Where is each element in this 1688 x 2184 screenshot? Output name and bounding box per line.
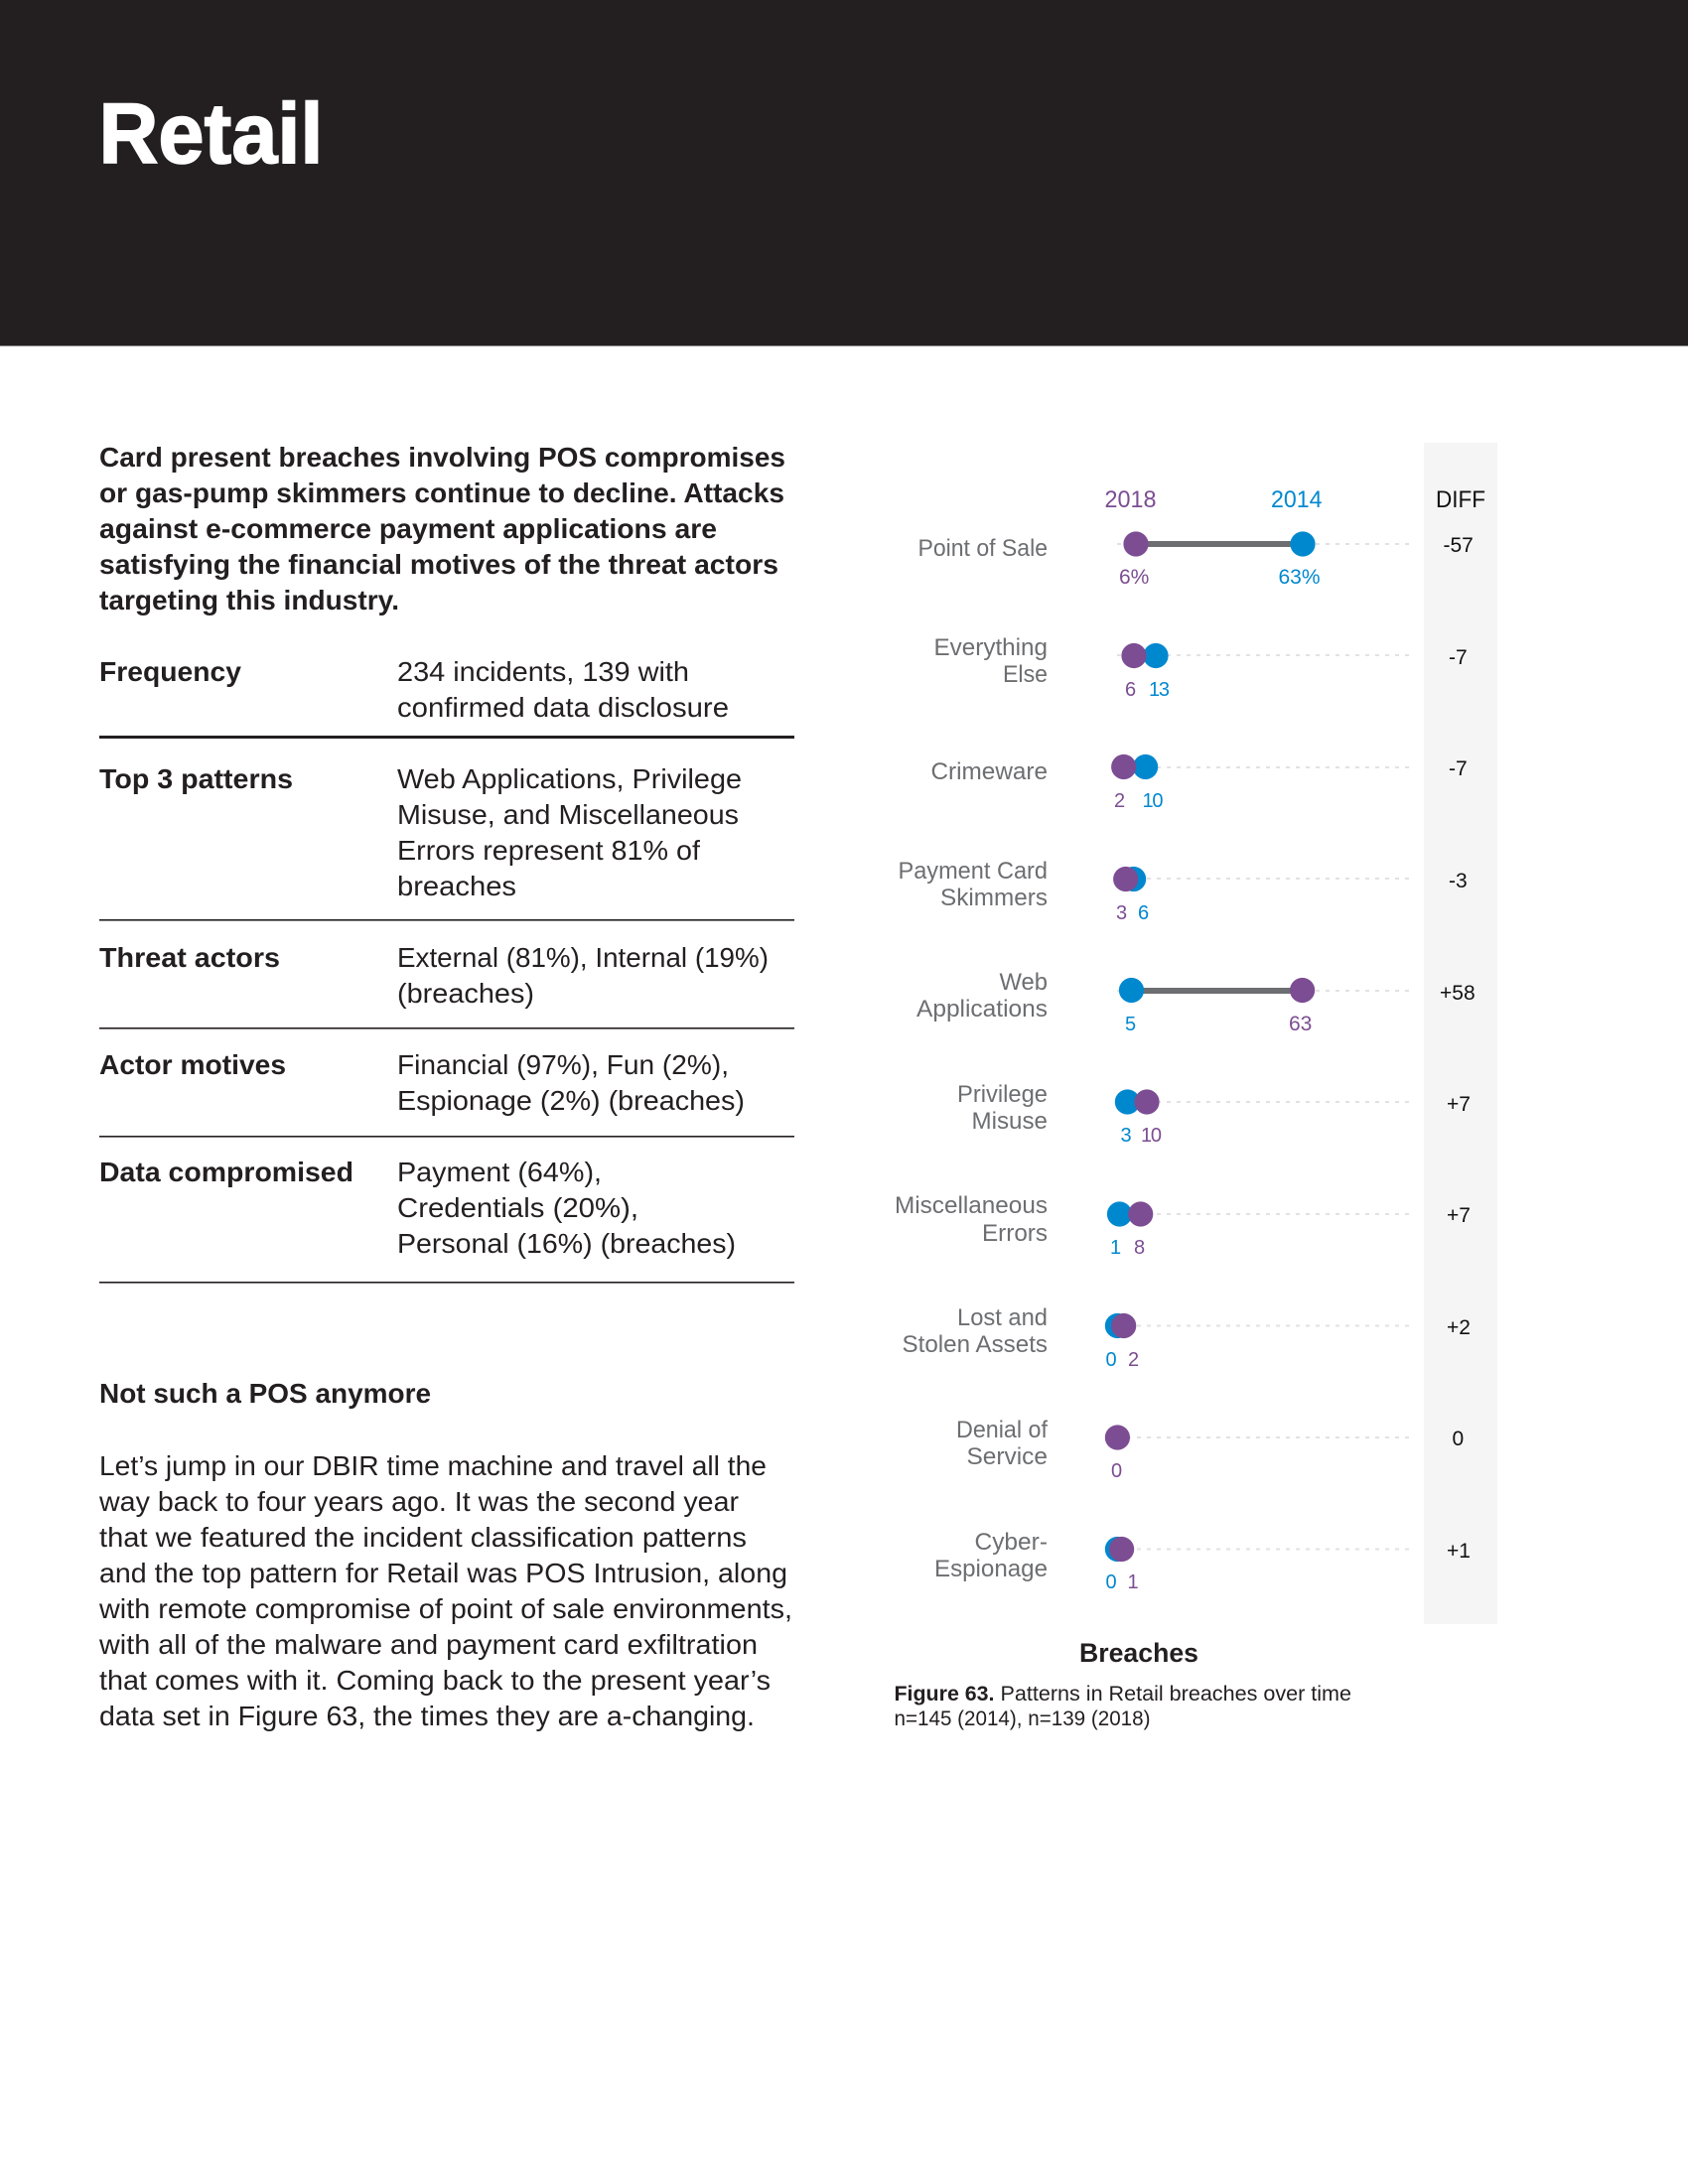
row: Miscellaneous Errors: +7 — [1447, 1204, 1471, 1227]
row: Denial of Service: 0 — [1111, 1460, 1122, 1482]
row: Payment Card Skimmers: 6 — [1138, 902, 1149, 924]
header band — [0, 0, 1688, 345]
row: actor motives: Espionage (2%) (breaches) — [397, 1085, 745, 1116]
row: Lost and Stolen Assets: 0 — [1106, 1349, 1117, 1371]
row: actor motives: Financial (97%), Fun (2%), — [397, 1049, 729, 1080]
row: Denial of Service: Service — [967, 1443, 1048, 1470]
row: Crimeware — [931, 754, 1468, 812]
row: Miscellaneous Errors: Errors — [982, 1220, 1048, 1247]
row: Everything Else: -7 — [1449, 646, 1468, 669]
row: Cyber-Espionage — [934, 1529, 1471, 1593]
row: Crimeware: 10 — [1142, 790, 1164, 812]
chart header: 2018: 2018 — [1104, 486, 1156, 513]
row: Cyber-Espionage: Cyber- — [975, 1529, 1048, 1556]
row: Web Applications: 63 — [1289, 1013, 1312, 1035]
row: Lost and Stolen Assets — [902, 1304, 1471, 1371]
row: frequency: 234 incidents, 139 with — [397, 656, 689, 687]
row: Web Applications: 5 — [1125, 1014, 1136, 1035]
row: Payment Card Skimmers: 3 — [1116, 902, 1127, 924]
row: Point of Sale — [917, 531, 1474, 589]
row: Lost and Stolen Assets: Stolen Assets — [902, 1331, 1048, 1358]
row: Payment Card Skimmers: Skimmers — [940, 885, 1048, 911]
figure caption: Figure 63. — [894, 1683, 995, 1706]
body paragraph: that comes with it. Coming back to the present year’s — [99, 1665, 771, 1696]
body paragraph: Let’s jump in our DBIR time machine and travel all the — [99, 1450, 767, 1481]
body paragraph: way back to four years ago. It was the second year — [98, 1486, 739, 1517]
row: Lost and Stolen Assets: Lost and — [957, 1304, 1048, 1331]
row: Cyber-Espionage: +1 — [1447, 1540, 1471, 1563]
row: threat actors: Threat actors — [99, 942, 280, 973]
intro text block: against e-commerce payment applications are — [99, 513, 717, 544]
title: Retail — [99, 86, 324, 182]
row: frequency — [99, 656, 794, 739]
row: actor motives: Actor motives — [99, 1049, 286, 1080]
row: Point of Sale: -57 — [1444, 534, 1474, 557]
row: frequency: confirmed data disclosure — [397, 692, 729, 723]
row: Web Applications: Applications — [916, 996, 1048, 1023]
row: Denial of Service: 0 — [1452, 1428, 1464, 1450]
section heading: Not such a POS anymore — [99, 1378, 431, 1409]
row: data compromised — [99, 1157, 794, 1284]
row: actor motives — [99, 1049, 794, 1138]
row: Privilege Misuse: 3 — [1120, 1125, 1132, 1147]
row: Lost and Stolen Assets: +2 — [1447, 1316, 1471, 1339]
row: Everything Else — [933, 634, 1468, 701]
row: Crimeware: 2 — [1114, 790, 1125, 812]
row: threat actors: External (81%), Internal (19%) — [397, 942, 769, 973]
body paragraph: data set in Figure 63, the times they are a-changing. — [99, 1701, 755, 1731]
row: Crimeware: -7 — [1449, 757, 1468, 780]
body paragraph: and the top pattern for Retail was POS Intrusion, along — [99, 1558, 787, 1588]
intro text block — [99, 442, 785, 615]
row: Privilege Misuse: +7 — [1447, 1093, 1471, 1116]
row: Denial of Service — [956, 1417, 1464, 1482]
row: data compromised: Credentials (20%), — [397, 1192, 638, 1223]
row: Miscellaneous Errors: 1 — [1110, 1237, 1121, 1259]
row: Web Applications — [916, 969, 1476, 1035]
chart title: Breaches — [1079, 1638, 1198, 1668]
row: Web Applications: +58 — [1440, 982, 1476, 1005]
row: Crimeware: Crimeware — [931, 758, 1048, 785]
facts table — [99, 656, 794, 1284]
row: data compromised: Data compromised — [99, 1157, 353, 1187]
row: Cyber-Espionage: 0 — [1106, 1571, 1117, 1593]
row: Privilege Misuse: Misuse — [971, 1108, 1048, 1135]
row: top 3 patterns: Web Applications, Privilege — [397, 763, 742, 794]
row: Privilege Misuse: 10 — [1141, 1125, 1162, 1147]
diff column background — [1424, 443, 1497, 1624]
figure caption: Patterns in Retail breaches over time — [1001, 1683, 1351, 1706]
row: Point of Sale: 6% — [1119, 566, 1149, 589]
intro text block: targeting this industry. — [99, 585, 399, 615]
intro text block: Card present breaches involving POS compromises — [99, 442, 785, 473]
intro text block: or gas-pump skimmers continue to decline. Attacks — [99, 478, 784, 508]
row: Payment Card Skimmers: -3 — [1449, 870, 1468, 892]
row: Miscellaneous Errors: Miscellaneous — [895, 1192, 1048, 1219]
row: Cyber-Espionage: 1 — [1128, 1571, 1139, 1593]
row: Miscellaneous Errors — [895, 1192, 1471, 1259]
row: data compromised: Personal (16%) (breaches) — [397, 1228, 736, 1259]
figure caption — [894, 1683, 1351, 1730]
row: frequency: Frequency — [99, 656, 241, 687]
row: Payment Card Skimmers — [898, 858, 1468, 924]
row: top 3 patterns: Misuse, and Miscellaneous — [397, 799, 739, 830]
row: Point of Sale: Point of Sale — [917, 535, 1048, 562]
row: Cyber-Espionage: Espionage — [934, 1556, 1048, 1582]
row: threat actors: (breaches) — [397, 978, 534, 1009]
row: Point of Sale: 63% — [1279, 566, 1321, 589]
row: Everything Else: 13 — [1149, 679, 1170, 701]
figure caption: n=145 (2014), n=139 (2018) — [894, 1707, 1150, 1730]
row: data compromised: Payment (64%), — [397, 1157, 602, 1187]
row: threat actors — [99, 942, 794, 1029]
body paragraph: that we featured the incident classification patterns — [99, 1522, 747, 1553]
row: top 3 patterns: Top 3 patterns — [99, 763, 293, 794]
row: top 3 patterns: breaches — [397, 871, 516, 901]
row: Everything Else: Else — [1003, 661, 1048, 688]
row: Lost and Stolen Assets: 2 — [1128, 1349, 1139, 1371]
body paragraph: with all of the malware and payment card exfiltration — [98, 1629, 758, 1660]
row: Privilege Misuse — [957, 1081, 1471, 1147]
dumbbell chart — [895, 531, 1476, 1593]
body paragraph: with remote compromise of point of sale environments, — [98, 1593, 792, 1624]
row: Denial of Service: Denial of — [956, 1417, 1048, 1443]
row: top 3 patterns — [99, 763, 794, 921]
intro text block: satisfying the financial motives of the threat actors — [99, 549, 778, 580]
row: Payment Card Skimmers: Payment Card — [898, 858, 1048, 885]
row: Web Applications: Web — [999, 969, 1048, 996]
row: top 3 patterns: Errors represent 81% of — [397, 835, 700, 866]
chart header: 2014: 2014 — [1271, 486, 1323, 513]
body paragraph — [98, 1450, 792, 1731]
row: Miscellaneous Errors: 8 — [1134, 1237, 1145, 1259]
row: Everything Else: 6 — [1125, 679, 1136, 701]
row: Everything Else: Everything — [933, 634, 1048, 661]
row: Privilege Misuse: Privilege — [957, 1081, 1048, 1108]
chart header: DIFF: DIFF — [1436, 486, 1485, 513]
